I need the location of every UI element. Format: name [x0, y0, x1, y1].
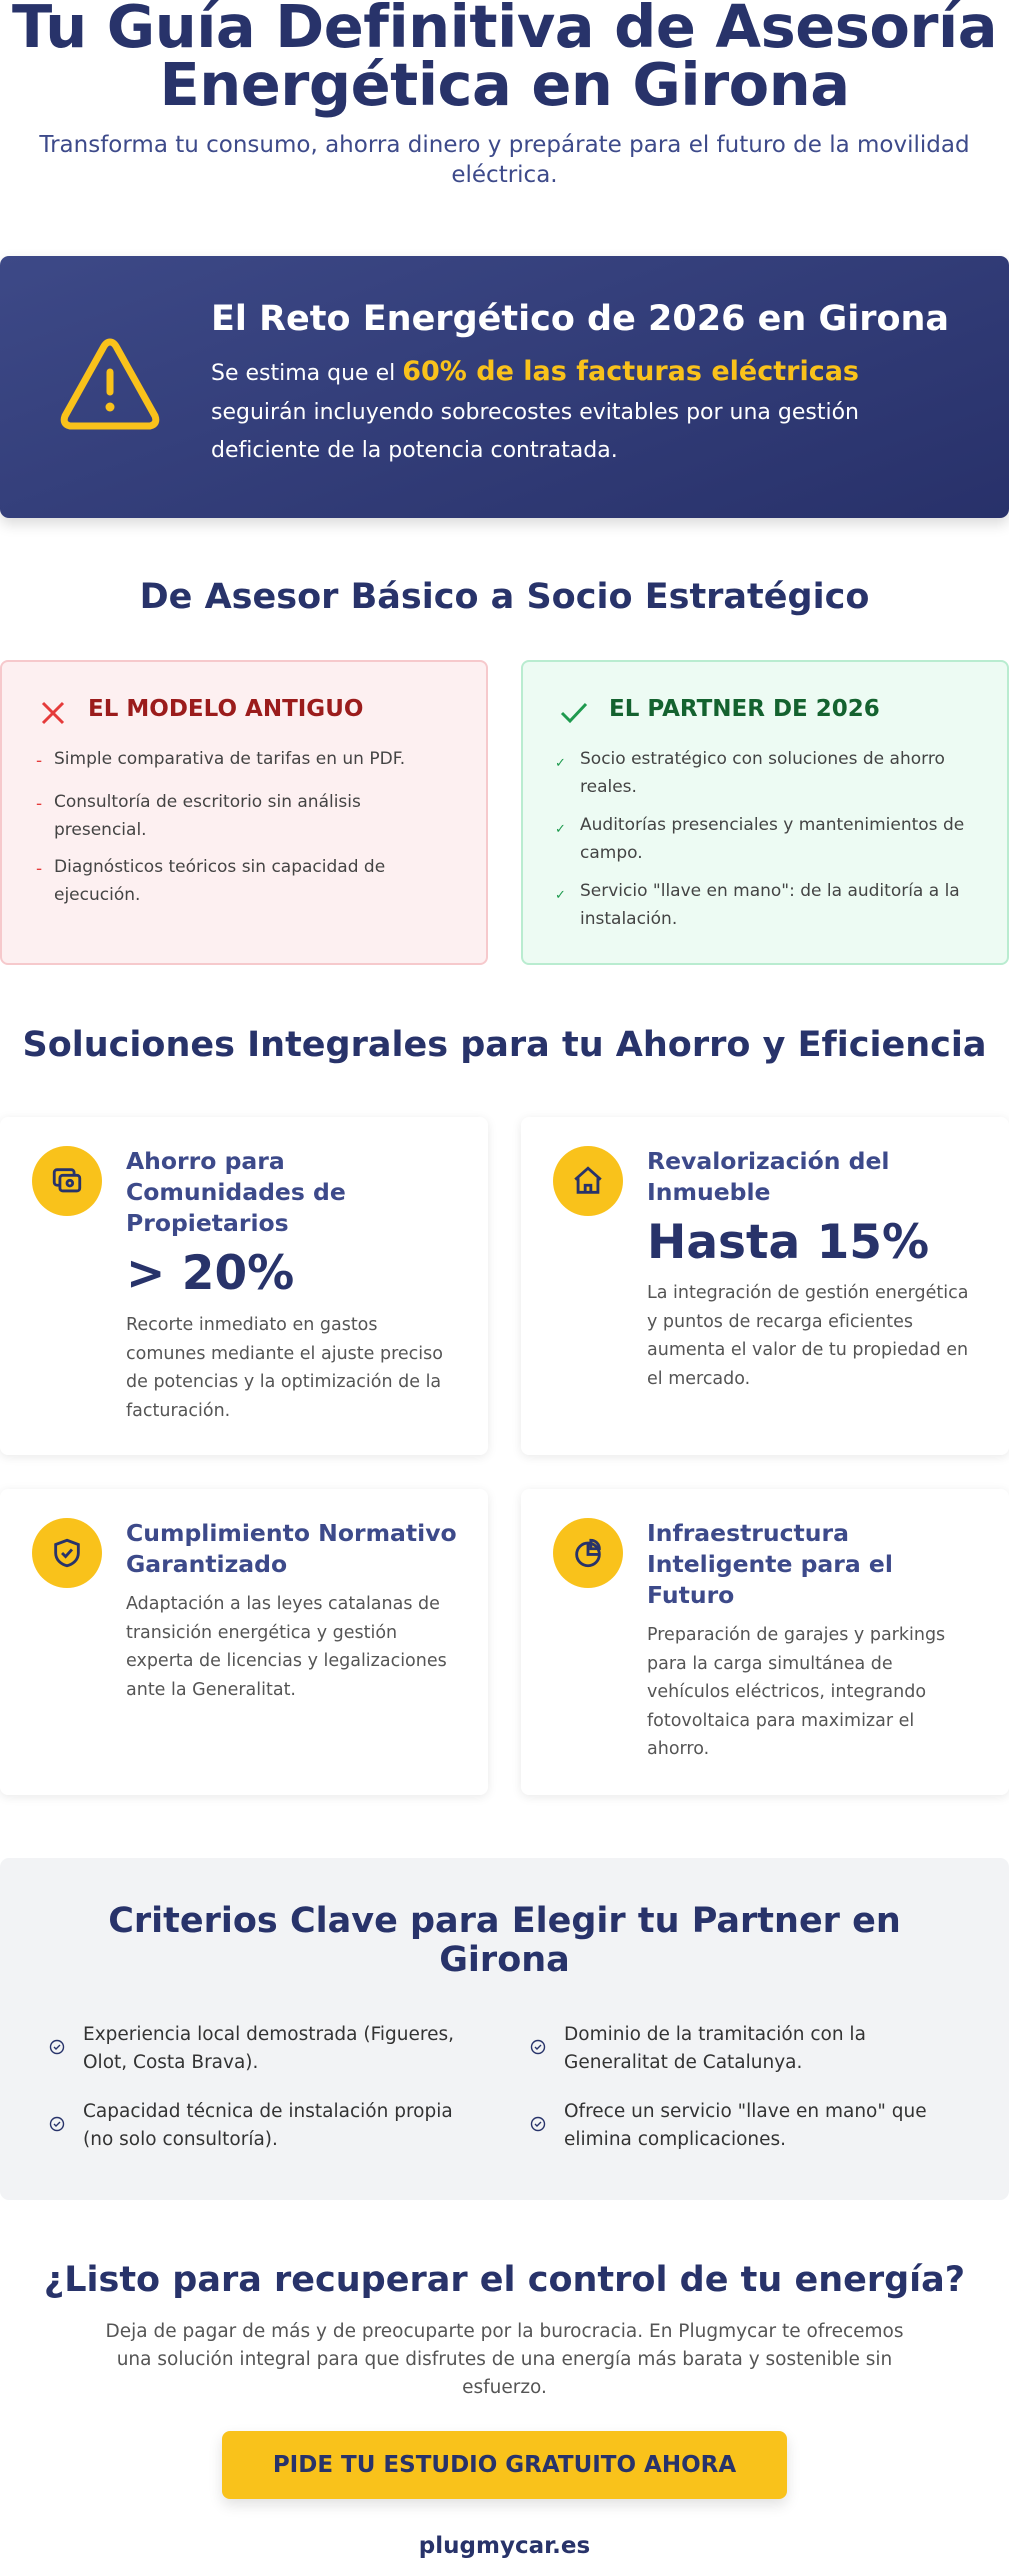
card: revalorizacion: Inmueble [647, 1178, 770, 1206]
panel: partner 2026: EL PARTNER DE 2026 [609, 696, 880, 722]
panel: old model: Consultoría de escritorio sin análisis presencial. [54, 792, 361, 840]
card: comunidades: Propietarios [126, 1209, 289, 1237]
panel: criteria: Experiencia local demostrada (Figueres, Olot, Costa Brava). [83, 2024, 454, 2073]
panel: partner 2026: Socio estratégico con soluciones de ahorro reales. [580, 749, 945, 797]
panel: partner 2026: Auditorías presenciales y mantenimientos de campo. [580, 815, 964, 863]
card: revalorizacion: Hasta 15% [647, 1215, 929, 1270]
criteria items [50, 2040, 64, 2054]
card: comunidades: Comunidades de [126, 1178, 346, 1206]
criteria heading: Criterios Clave para Elegir tu Partner en Girona [108, 1901, 901, 1980]
panel: partner 2026: ✓ [555, 756, 566, 771]
panel: partner 2026: ✓ [555, 822, 566, 837]
card: normativo: Cumplimiento Normativo [126, 1519, 457, 1547]
panel: partner 2026: ✓ [555, 888, 566, 903]
panel: criteria: Dominio de la tramitación con la Generalitat de Catalunya. [564, 2024, 866, 2073]
heading: comparison: De Asesor Básico a Socio Estratégico [140, 577, 869, 617]
CTA button: PIDE TU ESTUDIO GRATUITO AHORA [273, 2452, 736, 2478]
icon: money [32, 1146, 102, 1216]
title [12, 0, 997, 119]
card: comunidades [0, 1117, 488, 1455]
panel: criteria [0, 1858, 1009, 2200]
icon: chart [553, 1518, 623, 1588]
panel: partner 2026 [521, 660, 1009, 965]
card: infraestructura: Infraestructura [647, 1519, 849, 1547]
banner text: Se estima que el 60% de las facturas eléctricas seguirán incluyendo sobrecostes evitables por una gestión deficiente de la potencia contratada. [211, 356, 859, 463]
card: infraestructura: Preparación de garajes y parkings para la carga simultánea de vehículos eléctricos, integrando fotovoltaica para maximizar el ahorro. [647, 1625, 945, 1759]
subtitle: Transforma tu consumo, ahorra dinero y prepárate para el futuro de la movilidad eléctrica. [39, 132, 970, 188]
card: revalorizacion [521, 1117, 1009, 1455]
card: comunidades: > 20% [126, 1246, 294, 1301]
icon: shield [32, 1518, 102, 1588]
icon: cross [42, 702, 64, 724]
card: revalorizacion: Revalorización del [647, 1147, 889, 1175]
CTA heading: ¿Listo para recuperar el control de tu energía? [44, 2260, 965, 2300]
heading: solutions: Soluciones Integrales para tu Ahorro y Eficiencia [22, 1025, 986, 1065]
card: comunidades: Ahorro para [126, 1147, 285, 1175]
icon: warning [60, 338, 160, 430]
card: normativo: Adaptación a las leyes catalanas de transición energética y gestión experta de licencias y legalizaciones ante la Generalitat. [126, 1594, 447, 1700]
icon: house [553, 1146, 623, 1216]
panel: old model [0, 660, 488, 965]
card: infraestructura [521, 1489, 1009, 1795]
card: normativo [0, 1489, 488, 1795]
footer: plugmycar.es [419, 2533, 590, 2559]
CTA button [222, 2431, 787, 2499]
card: comunidades: Recorte inmediato en gastos comunes mediante el ajuste preciso de potencias y la optimización de la facturación. [126, 1315, 443, 1420]
panel: old model: - [36, 794, 42, 814]
panel: old model: - [36, 751, 42, 771]
panel: partner 2026: Servicio "llave en mano": de la auditoría a la instalación. [580, 881, 960, 929]
panel: old model: - [36, 859, 42, 879]
panel: criteria: Capacidad técnica de instalación propia (no solo consultoría). [83, 2101, 453, 2150]
icon: check [561, 703, 587, 724]
card: revalorizacion: La integración de gestión energética y puntos de recarga eficientes aumenta el valor de tu propiedad en el mercado. [647, 1283, 968, 1388]
banner: energy challenge [0, 256, 1009, 518]
panel: old model: Diagnósticos teóricos sin capacidad de ejecución. [54, 857, 385, 905]
panel: old model: EL MODELO ANTIGUO [88, 696, 363, 722]
card: infraestructura: Inteligente para el [647, 1550, 893, 1578]
title: Energética en Girona [159, 50, 850, 119]
CTA text: Deja de pagar de más y de preocuparte por la burocracia. En Plugmycar te ofrecemos una solución integral para que disfrutes de una energía más barata y sostenible sin esfuerzo. [106, 2321, 904, 2398]
card: normativo: Garantizado [126, 1550, 287, 1578]
panel: old model: Simple comparativa de tarifas en un PDF. [54, 749, 405, 769]
panel: criteria: Ofrece un servicio "llave en mano" que elimina complicaciones. [564, 2101, 927, 2150]
card: infraestructura: Futuro [647, 1581, 734, 1609]
banner heading: El Reto Energético de 2026 en Girona [211, 299, 949, 339]
